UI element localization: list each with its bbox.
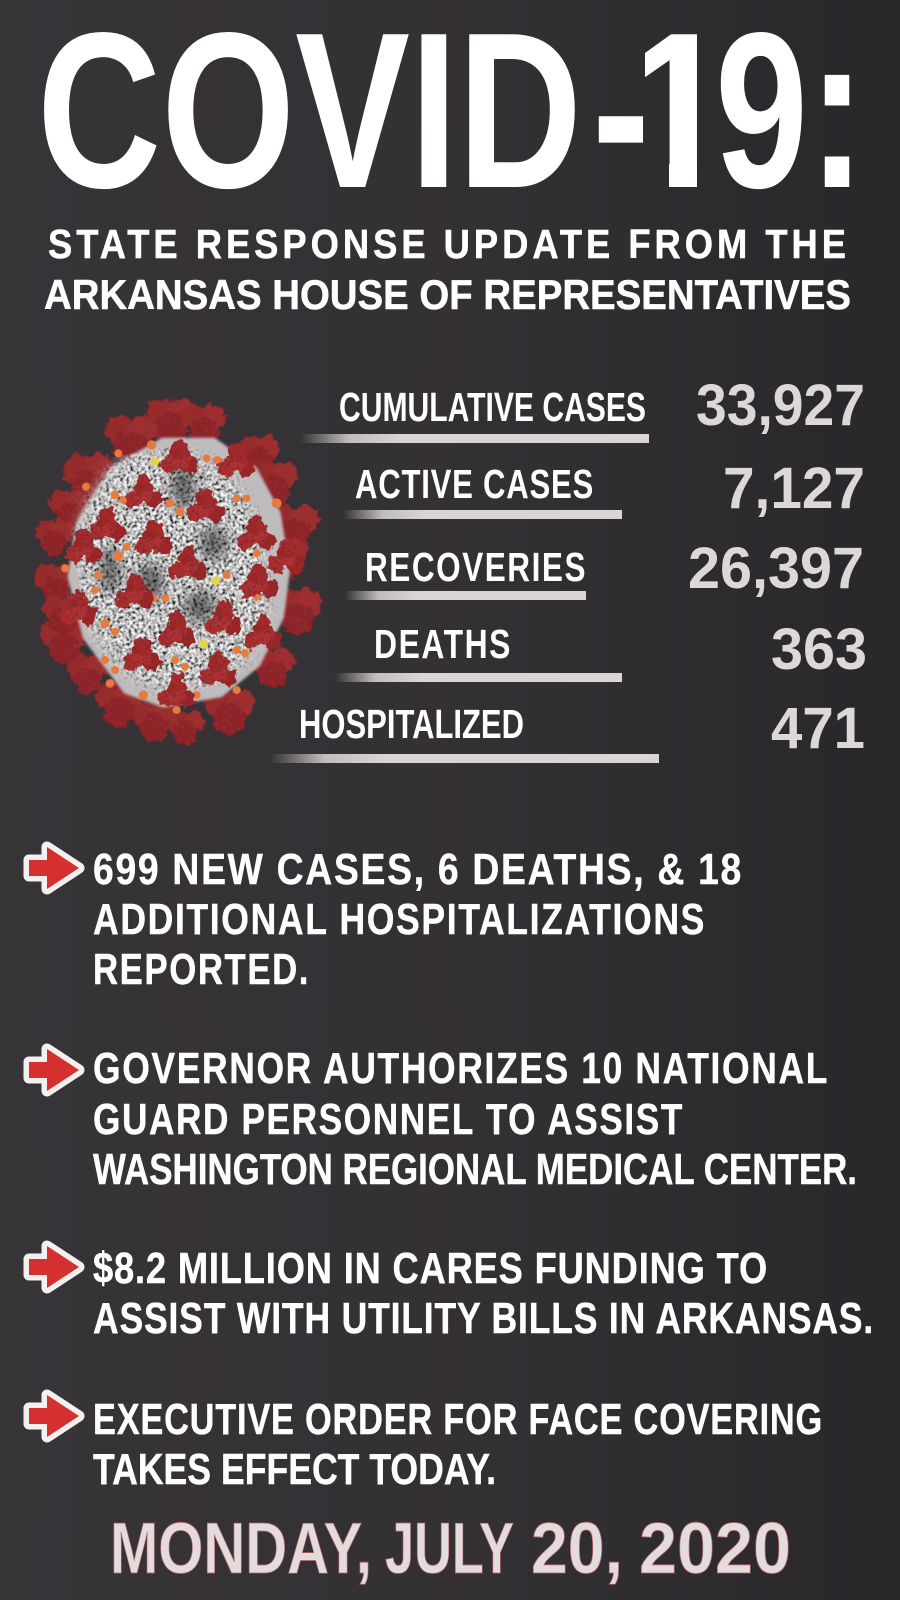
bullet 2 [29,1044,857,1194]
icon: red arrow [29,847,79,889]
stat row: cumulative cases: 33,927 [696,373,865,438]
stat row: deaths: 363 [771,617,867,682]
date footer: MONDAY, [110,1509,372,1589]
stat row: hospitalized: HOSPITALIZED [299,701,524,747]
bullet 1: 699 NEW CASES, 6 DEATHS, & 18 [93,845,743,894]
stat row: hospitalized [270,696,865,763]
date footer: 20, [531,1509,623,1589]
stat row: recoveries [345,536,864,601]
stat row: recoveries: RECOVERIES [365,544,587,590]
stat row: hospitalized: 471 [771,696,865,761]
stat row: active cases [343,456,865,521]
stat row: cumulative cases [300,373,865,443]
title [44,32,850,190]
bullet 4: TAKES EFFECT TODAY. [93,1445,496,1494]
icon: red arrow [29,1395,79,1437]
bullet 1: ADDITIONAL HOSPITALIZATIONS [93,895,706,944]
stat row: active cases: ACTIVE CASES [355,461,594,507]
icon: red arrow [29,1049,79,1091]
bullet 2: GUARD PERSONNEL TO ASSIST [93,1095,684,1144]
stat row: deaths [335,617,867,682]
date footer: JULY [385,1509,514,1589]
stat row: cumulative cases: CUMULATIVE CASES [339,384,646,430]
stat row: active cases: 7,127 [723,456,865,521]
bullet 3: $8.2 MILLION IN CARES FUNDING TO [93,1244,768,1293]
bullet 1 [29,845,743,994]
dark shading on body [100,463,227,622]
stat row: deaths: DEATHS [374,621,512,667]
bullet 4 [29,1395,823,1494]
icon: red arrow [29,1246,79,1288]
bullet 3 [29,1244,874,1343]
stat row: recoveries: 26,397 [688,536,864,601]
subtitle [44,221,851,318]
bullet 1: REPORTED. [93,945,310,994]
date footer [110,1509,791,1589]
date footer: 2020 [639,1509,791,1589]
virus illustration [35,398,322,745]
